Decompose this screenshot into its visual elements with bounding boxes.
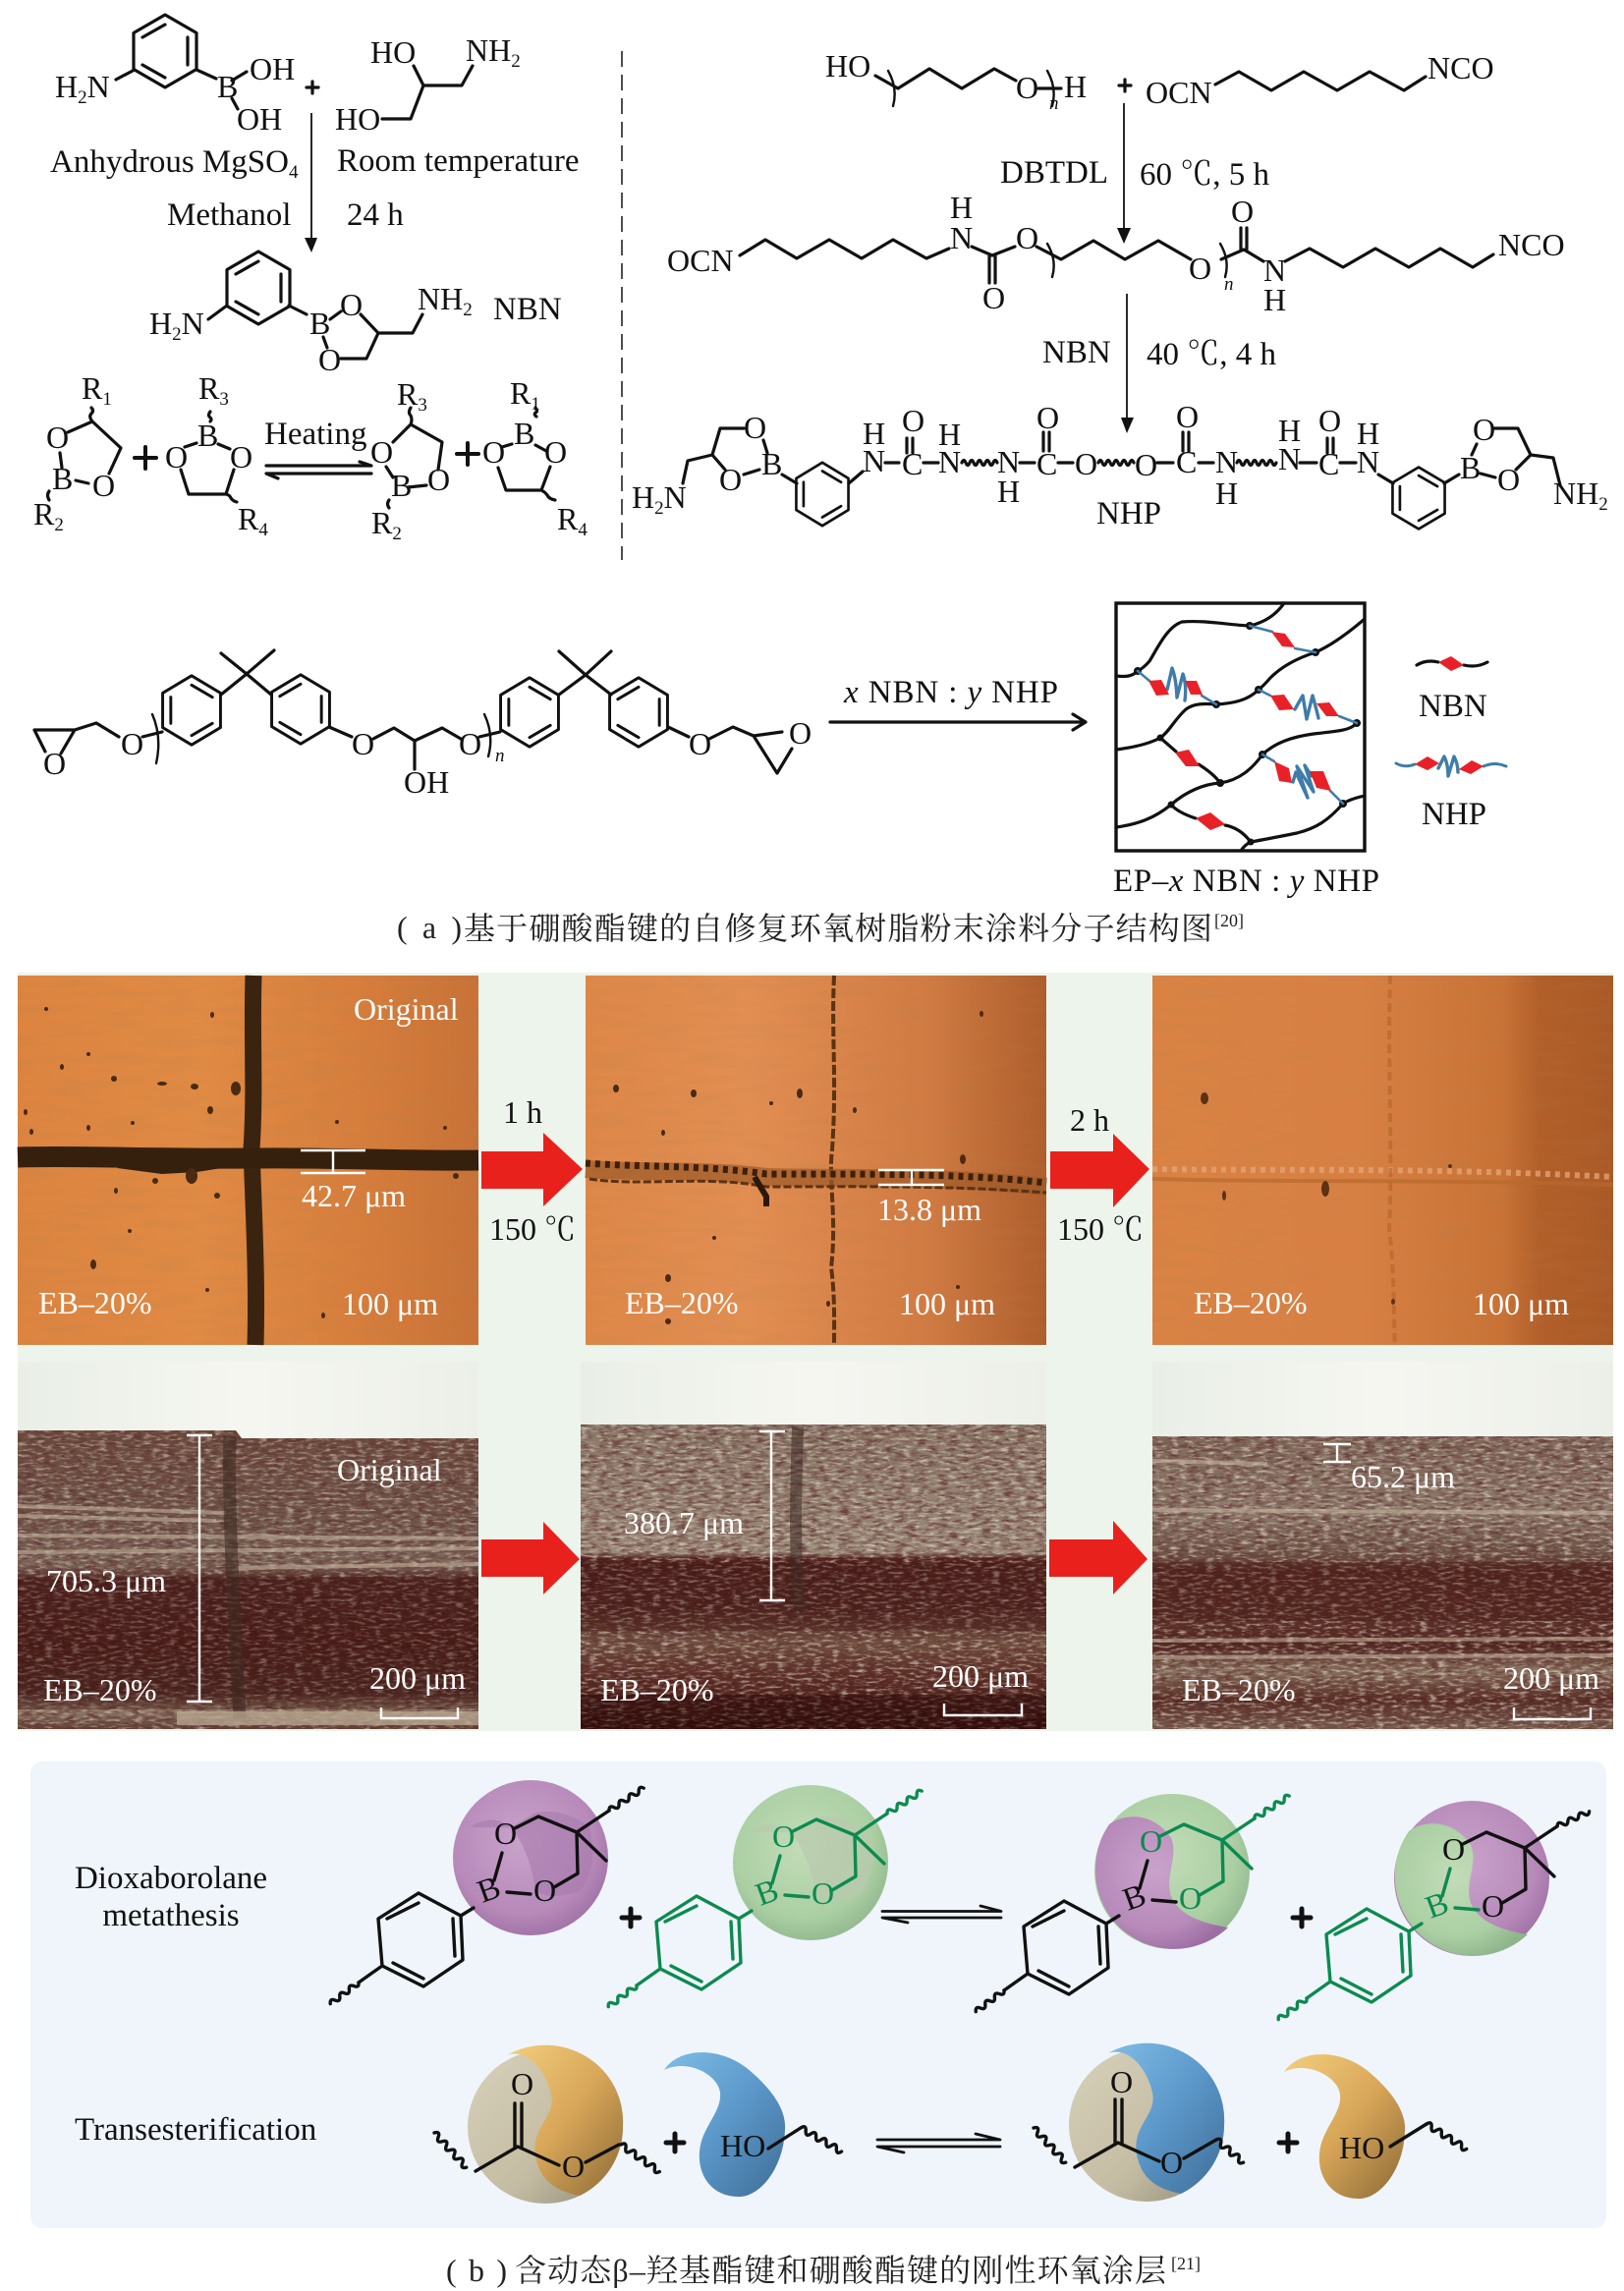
- scheme: NBN synthesis and boronic ester exchange: [33, 15, 588, 544]
- exchange reactant 1: R: [82, 370, 102, 406]
- reaction conditions left: Anhydrous MgSO: [50, 144, 289, 180]
- panel: reaction mechanisms: [30, 1761, 1606, 2228]
- structure: NHP: N: [1278, 441, 1301, 476]
- structure: metathesis product 1: [975, 1794, 1291, 2014]
- structure: polyether diol: [825, 48, 1087, 114]
- plus sign: [1119, 80, 1131, 91]
- plus sign: [1279, 2134, 1297, 2151]
- structure: metathesis product 2: O: [1442, 1831, 1465, 1867]
- exchange product 2: O: [544, 434, 567, 470]
- micrograph row 1 panel 1: original scratch: Original: [354, 991, 459, 1027]
- label: Dioxaborolane metathesis: [75, 1861, 267, 1933]
- structure: NHP: C: [1176, 444, 1197, 479]
- structure: NBN: O: [318, 342, 341, 377]
- exchange product 1: O: [370, 434, 393, 470]
- structure: NCO prepolymer: OCN: [667, 243, 734, 278]
- structure: epoxy resin: OH: [404, 764, 449, 800]
- structure: beta-hydroxy ester reactant: [432, 2045, 661, 2204]
- plus sign: [307, 82, 318, 93]
- structure: ester product: O: [1160, 2145, 1183, 2180]
- measurement bracket: [301, 1150, 365, 1173]
- exchange reactant 2: O: [230, 439, 252, 475]
- structure: purple dioxaborolane: [329, 1780, 645, 2006]
- structure: NCO prepolymer: O: [1231, 194, 1254, 229]
- structure: 3-amino-1,2-propanediol: HO: [335, 101, 380, 137]
- structure: NCO prepolymer: O: [1016, 220, 1038, 255]
- structure: NHP: B: [1460, 450, 1481, 485]
- structure: orange hydroxyl drop: HO: [1339, 2130, 1384, 2165]
- structure: 3-amino-1,2-propanediol: [335, 32, 521, 137]
- structure: NBN: 2: [463, 300, 473, 320]
- structure: NHP: NH: [1553, 475, 1598, 511]
- network diagram: [1116, 603, 1365, 851]
- micrograph row 1 panel 3: after 2 h: [1152, 976, 1613, 1345]
- arrow with ratio label: [830, 675, 1086, 730]
- micrograph row 1 panel 2: after 1 h: 100 μm: [899, 1286, 995, 1321]
- structure: polyether diol: H: [1064, 69, 1087, 104]
- structure: NCO prepolymer: NCO: [1498, 227, 1565, 262]
- caption b: ( b ): [446, 2253, 507, 2288]
- micrograph row 2 panel 2: after 1 h cross-section: [581, 1362, 1046, 1729]
- exchange product 1: B: [391, 468, 412, 503]
- structure: 3-aminophenylboronic acid: H: [55, 69, 78, 104]
- structure: epoxy resin: O: [689, 726, 711, 761]
- label: Transesterification: Transesterification: [75, 2112, 316, 2148]
- structure: epoxy resin: O: [352, 726, 374, 761]
- structure: NBN: NH: [418, 281, 463, 316]
- structure: NHP: H: [1278, 413, 1301, 448]
- scale bar: [944, 1704, 1022, 1715]
- structure: epoxy resin: O: [121, 726, 143, 761]
- structure: NHP: C: [1318, 446, 1339, 481]
- structure: blue hydroxyl drop: [664, 2052, 843, 2197]
- structure: NBN: H: [149, 306, 172, 341]
- structure: NBN: N: [182, 306, 204, 341]
- equilibrium arrows: [266, 462, 371, 478]
- structure: HDI: NCO: [1428, 50, 1494, 85]
- network caption: EP–x NBN : y NHP: [1113, 864, 1379, 899]
- reaction conditions right: [337, 143, 580, 233]
- structure: NHP: O: [1318, 403, 1341, 438]
- structure: epoxy resin: O: [789, 715, 812, 751]
- structure: NHP: H: [997, 474, 1020, 509]
- arrow and condition: 2 h 150 C: [1050, 1102, 1149, 1247]
- structure: NHP: H: [863, 416, 885, 451]
- exchange reactant 2: 3: [219, 389, 229, 410]
- plus sign: [666, 2134, 684, 2151]
- equilibrium arrows: [882, 1906, 1001, 1923]
- dynamic linkers: [1138, 626, 1357, 830]
- exchange reactant 2: R: [238, 501, 258, 536]
- exchange product 1: 3: [418, 395, 427, 416]
- structure: NHP: H: [632, 479, 654, 515]
- plus sign: [622, 1909, 640, 1927]
- structure: metathesis product 1: O: [1179, 1880, 1202, 1916]
- reaction conditions left: [50, 144, 299, 233]
- structure: NHP: O: [1497, 462, 1520, 497]
- structure: metathesis product 2: O: [1482, 1888, 1504, 1924]
- micrograph row 1 panel 1: original scratch: 42.7 μm: [302, 1178, 406, 1213]
- structure: purple dioxaborolane: O: [533, 1872, 556, 1908]
- exchange product 1: O: [427, 462, 450, 497]
- micrograph row 2 panel 2: after 1 h cross-section: 380.7 μm: [624, 1505, 744, 1540]
- structure: polyether diol: O: [1016, 70, 1038, 105]
- legend: NBN: [1417, 656, 1487, 724]
- exchange product 2: R: [510, 375, 531, 411]
- structure: NHP: B: [761, 446, 782, 481]
- reaction conditions right: 24 h: [347, 197, 404, 233]
- arrow and condition: 1 h 150 C: [481, 1094, 583, 1247]
- label: Dioxaborolane metathesis: Dioxaborolane: [75, 1861, 267, 1896]
- exchange product 2: B: [514, 416, 534, 451]
- thickness bar: [759, 1431, 785, 1600]
- reaction conditions right: Room temperature: [337, 143, 580, 179]
- structure: polyether diol: HO: [825, 48, 870, 84]
- legend: NHP: NHP: [1422, 797, 1486, 832]
- conditions: 60 C 5 h: 60 ℃, 5 h: [1140, 157, 1269, 193]
- equilibrium arrows: [877, 2134, 1000, 2152]
- arrow: [1049, 1521, 1148, 1594]
- arrow: NBN synthesis: [305, 113, 317, 252]
- exchange reactant 2: R: [198, 370, 219, 406]
- arrow and condition: 1 h 150 C: 1 h: [503, 1094, 542, 1130]
- thickness bar: [1323, 1444, 1351, 1462]
- structure: NHP: N: [664, 479, 687, 515]
- conditions: DBTDL: DBTDL: [1000, 155, 1108, 191]
- micrograph row 2 panel 1: original cross-section: 200 μm: [369, 1660, 466, 1696]
- exchange reactant 1: R: [33, 496, 54, 531]
- arrow and condition: 1 h 150 C: 150 ℃: [489, 1211, 576, 1247]
- structure: NCO prepolymer: H: [1263, 282, 1286, 317]
- structure: 3-aminophenylboronic acid: N: [87, 69, 110, 104]
- micrograph row 1 panel 3: after 2 h: EB–20%: [1194, 1285, 1308, 1320]
- structure: 3-aminophenylboronic acid: OH: [250, 51, 295, 86]
- structure: green dioxaborolane: O: [812, 1875, 834, 1911]
- structure: metathesis product 1: B: [1118, 1877, 1150, 1919]
- micrograph row 2 panel 1: original cross-section: EB–20%: [43, 1672, 157, 1707]
- structure: metathesis product 1: O: [1140, 1823, 1162, 1859]
- structure: NHP: N: [938, 444, 961, 479]
- structure: green dioxaborolane: B: [751, 1872, 783, 1914]
- legend: NBN: NBN: [1419, 689, 1487, 724]
- structure: NBN: [149, 251, 473, 377]
- structure: green dioxaborolane: O: [772, 1818, 795, 1854]
- structure: polyether diol: n: [1049, 93, 1059, 114]
- structure: 3-aminophenylboronic acid: 2: [78, 87, 87, 108]
- plus sign: [135, 447, 156, 469]
- structure: NBN: 2: [172, 324, 182, 345]
- label: NBN: NBN: [493, 292, 562, 327]
- micrograph row 2 panel 2: after 1 h cross-section: EB–20%: [600, 1672, 714, 1707]
- structure: 3-amino-1,2-propanediol: NH: [466, 32, 511, 68]
- exchange reactant 2: O: [165, 439, 188, 475]
- micrograph row 1 panel 1: original scratch: [18, 976, 478, 1345]
- structure: NCO prepolymer: H: [950, 190, 973, 225]
- exchange reactant 1: 2: [54, 515, 64, 535]
- structure: NCO prepolymer: n: [1224, 274, 1234, 295]
- exchange reactant 1: B: [52, 461, 73, 496]
- structure: orange hydroxyl drop: [1284, 2054, 1468, 2199]
- micrograph row 1 panel 2: after 1 h: [586, 976, 1046, 1345]
- caption a: 基于硼酸酯键的自修复环氧树脂粉末涂料分子结构图: [464, 911, 1212, 946]
- structure: 3-aminophenylboronic acid: B: [217, 69, 238, 104]
- structure: NHP: C: [902, 446, 923, 481]
- caption b: [21]: [1171, 2254, 1201, 2273]
- structure: NHP: N: [997, 444, 1020, 479]
- arrow: prepolymer step: [1117, 103, 1131, 244]
- structure: NHP: O: [902, 403, 924, 438]
- micrograph row 2 panel 3: after 2 h cross-section: EB–20%: [1182, 1672, 1296, 1707]
- structure: NHP: O: [1036, 400, 1059, 435]
- structure: NHP: C: [1036, 446, 1057, 481]
- structure: epoxy resin: O: [459, 726, 481, 761]
- structure: NHP: O: [744, 410, 766, 445]
- structure: ester product: O: [1110, 2064, 1133, 2099]
- structure: NHP: N: [1215, 444, 1238, 479]
- reaction conditions left: Methanol: [167, 197, 291, 233]
- reaction conditions left: 4: [289, 162, 299, 183]
- structure: purple dioxaborolane: O: [494, 1816, 517, 1851]
- exchange reactant 1: O: [46, 419, 69, 455]
- exchange product 1: 2: [392, 524, 402, 544]
- micrograph row 2 panel 1: original cross-section: Original: [337, 1452, 442, 1487]
- exchange reactant 2: 4: [258, 520, 268, 540]
- structure: blue hydroxyl drop: HO: [720, 2128, 765, 2163]
- scale bar: [381, 1707, 458, 1718]
- structure: purple dioxaborolane: B: [473, 1870, 505, 1911]
- exchange product 2: 4: [578, 520, 588, 540]
- structure: HDI: [1146, 50, 1494, 110]
- plus sign: [1293, 1909, 1311, 1927]
- structure: NCO prepolymer: O: [982, 280, 1005, 315]
- structure: metathesis product 2: [1277, 1801, 1591, 2022]
- micrograph row 2 panel 1: original cross-section: [18, 1362, 478, 1729]
- micrograph row 2 panel 3: after 2 h cross-section: [1152, 1362, 1613, 1729]
- structure: NHP: O: [719, 462, 742, 497]
- structure: ester product: [1032, 2043, 1246, 2202]
- scheme: NHP synthesis: [632, 48, 1608, 531]
- structure: epoxy resin: n: [495, 746, 505, 766]
- legend: NHP: [1396, 756, 1506, 832]
- structure: NHP: H: [1215, 475, 1238, 511]
- arrow: [481, 1522, 580, 1594]
- structure: NHP: H: [938, 417, 961, 452]
- structure: NHP: N: [863, 443, 885, 478]
- exchange product 1: [370, 376, 450, 544]
- micrograph row 1 panel 2: after 1 h: EB–20%: [625, 1285, 739, 1320]
- exchange product 2: 1: [531, 394, 540, 415]
- structure: epoxy resin: [34, 650, 812, 800]
- caption b: 含动态β–羟基酯键和硼酸酯键的刚性环氧涂层: [515, 2253, 1166, 2288]
- conditions: 40 C 4 h: 40 ℃, 4 h: [1147, 337, 1277, 372]
- label: Heating: Heating: [264, 417, 366, 452]
- exchange reactant 2: [165, 370, 268, 540]
- label: NHP: NHP: [1096, 496, 1161, 531]
- exchange reactant 1: [33, 370, 121, 535]
- structure: NHP: O: [1075, 446, 1097, 481]
- structure: NCO prepolymer: O: [1189, 251, 1211, 286]
- micrograph row 1 panel 3: after 2 h: 100 μm: [1473, 1286, 1569, 1321]
- exchange product 2: R: [557, 501, 578, 536]
- micrograph row 2 panel 1: original cross-section: 705.3 μm: [46, 1563, 166, 1598]
- structure: NHP: 2: [654, 498, 664, 519]
- structure: NCO prepolymer: [667, 190, 1565, 317]
- caption a: [20]: [1214, 911, 1244, 930]
- exchange product 2: O: [482, 434, 505, 470]
- structure: green dioxaborolane: [607, 1785, 924, 2009]
- crosslinked chains: [1116, 603, 1365, 851]
- structure: NHP: O: [1176, 399, 1199, 434]
- micrograph row 1 panel 1: original scratch: EB–20%: [38, 1285, 152, 1320]
- structure: NBN: B: [309, 306, 330, 341]
- structure: beta-hydroxy ester reactant: O: [511, 2066, 533, 2101]
- structure: 3-aminophenylboronic acid: [55, 15, 295, 137]
- structure: NHP: O: [1473, 412, 1495, 447]
- structure: NHP: O: [1135, 447, 1157, 482]
- structure: NBN: O: [340, 287, 363, 322]
- measurement bracket: [878, 1170, 944, 1185]
- exchange reactant 1: 1: [102, 389, 112, 410]
- micrograph row 2 panel 2: after 1 h cross-section: 200 μm: [932, 1658, 1029, 1694]
- conditions: NBN: NBN: [1042, 335, 1111, 370]
- caption a: ( a ): [397, 910, 462, 945]
- structure: epoxy resin: O: [43, 746, 66, 781]
- structure: beta-hydroxy ester reactant: O: [562, 2149, 585, 2184]
- exchange reactant 1: O: [92, 468, 115, 503]
- structure: 3-aminophenylboronic acid: OH: [237, 101, 282, 137]
- arrow with ratio label: x NBN : y NHP: [843, 675, 1058, 710]
- exchange product 1: R: [371, 505, 392, 540]
- structure: 3-amino-1,2-propanediol: 2: [511, 51, 521, 72]
- micrograph row 1 panel 2: after 1 h: 13.8 μm: [877, 1192, 981, 1227]
- structure: NHP: [632, 399, 1608, 529]
- exchange product 1: R: [397, 376, 418, 412]
- structure: HDI: OCN: [1146, 75, 1212, 110]
- micrograph row 2 panel 3: after 2 h cross-section: 65.2 μm: [1351, 1459, 1455, 1494]
- plus sign: [457, 443, 478, 465]
- arrow and condition: 2 h 150 C: 150 ℃: [1057, 1211, 1144, 1247]
- structure: metathesis product 2: B: [1421, 1885, 1453, 1927]
- structure: NCO prepolymer: N: [1263, 252, 1286, 288]
- structure: NHP: H: [1357, 416, 1379, 451]
- micrograph row 2 panel 3: after 2 h cross-section: 200 μm: [1503, 1660, 1599, 1696]
- exchange product 2: [482, 375, 588, 540]
- label: Dioxaborolane metathesis: metathesis: [102, 1898, 240, 1933]
- structure: NHP: 2: [1598, 494, 1608, 515]
- exchange reactant 2: B: [197, 418, 218, 453]
- structure: 3-amino-1,2-propanediol: HO: [370, 34, 416, 70]
- arrow: NBN capping step: [1121, 294, 1134, 433]
- micrograph row 1 panel 1: original scratch: 100 μm: [342, 1286, 438, 1321]
- structure: NHP: N: [1357, 444, 1379, 479]
- scale bar: [1514, 1707, 1591, 1719]
- structure: NCO prepolymer: N: [950, 220, 973, 255]
- arrow and condition: 2 h 150 C: 2 h: [1070, 1102, 1109, 1138]
- junction nodes: [1134, 622, 1361, 845]
- thickness bar: [187, 1435, 212, 1702]
